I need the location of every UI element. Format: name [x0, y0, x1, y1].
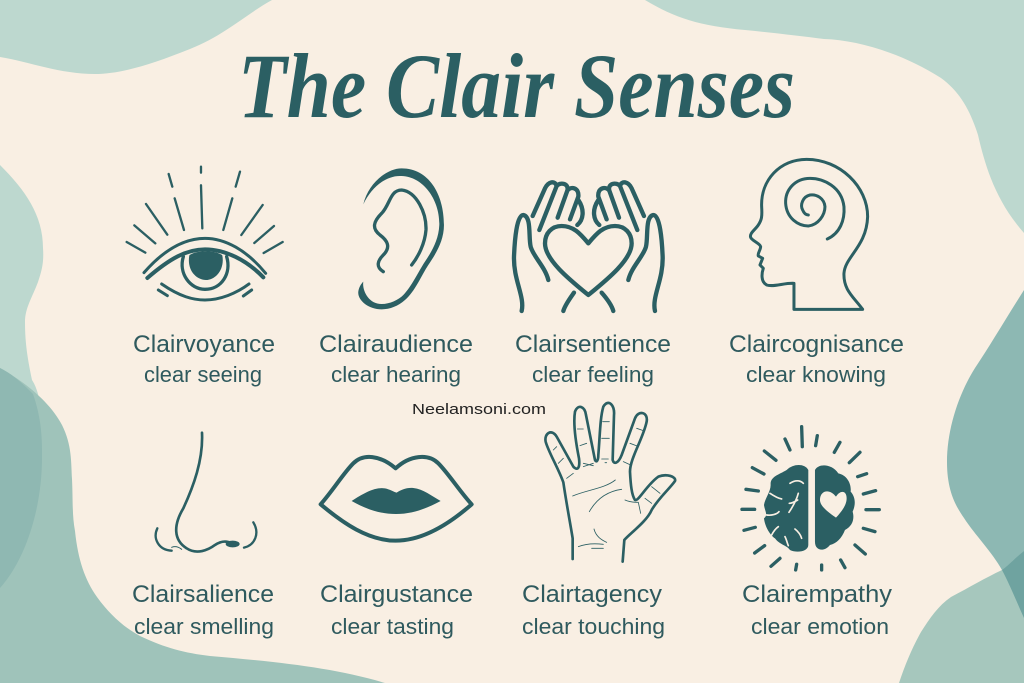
- background blob: top right: [645, 0, 1024, 233]
- icon: head with spiral: [750, 159, 868, 309]
- icon: ear: [358, 168, 444, 309]
- label: Claircognisance: Claircognisance: [729, 331, 904, 358]
- label: Clairgustance: Clairgustance: [320, 581, 473, 608]
- label: Clairsalience: Clairsalience: [132, 581, 274, 608]
- label: Clairempathy: [742, 581, 892, 639]
- label: Clairtagency: Clairtagency: [522, 581, 662, 608]
- icon: radiant brain with heart: [742, 427, 879, 570]
- label: Clairsentience: Clairsentience: [515, 331, 671, 358]
- label: Clairsalience: clear smelling: [134, 614, 274, 639]
- background blob: top left: [0, 0, 272, 74]
- label: Clairsentience: [515, 331, 671, 387]
- label: Clairempathy: Clairempathy: [742, 581, 892, 608]
- watermark: Neelamsoni.com: [412, 401, 546, 418]
- background blob: left overlap: [0, 368, 42, 588]
- label: Clairempathy: clear emotion: [751, 614, 889, 639]
- label: Claircognisance: clear knowing: [746, 362, 886, 387]
- background blob: bottom right: [899, 551, 1024, 683]
- label: Clairvoyance: [133, 331, 275, 387]
- icon: lips: [321, 457, 472, 541]
- label: Clairvoyance: Clairvoyance: [133, 331, 275, 358]
- icon: hands holding heart: [514, 182, 663, 311]
- icon: nose: [156, 433, 256, 552]
- background blob: right overlap: [1002, 551, 1024, 618]
- icon: open hand: [545, 403, 675, 562]
- background blob: left side: [0, 165, 43, 588]
- label: Clairtagency: [522, 581, 665, 639]
- label: Clairaudience: Clairaudience: [319, 331, 473, 358]
- label: Clairsentience: clear feeling: [532, 362, 654, 387]
- icon: eye with rays: [127, 167, 283, 300]
- background blob: right side: [947, 290, 1024, 618]
- label: Clairtagency: clear touching: [522, 614, 665, 639]
- label: Clairvoyance: clear seeing: [144, 362, 262, 387]
- label: Clairaudience: [319, 331, 473, 387]
- title: The Clair Senses: [238, 35, 795, 137]
- label: Clairgustance: clear tasting: [331, 614, 454, 639]
- label: Clairgustance: [320, 581, 473, 639]
- label: Claircognisance: [729, 331, 904, 387]
- label: Clairaudience: clear hearing: [331, 362, 461, 387]
- background blob: bottom left: [0, 368, 385, 683]
- label: Clairsalience: [132, 581, 274, 639]
